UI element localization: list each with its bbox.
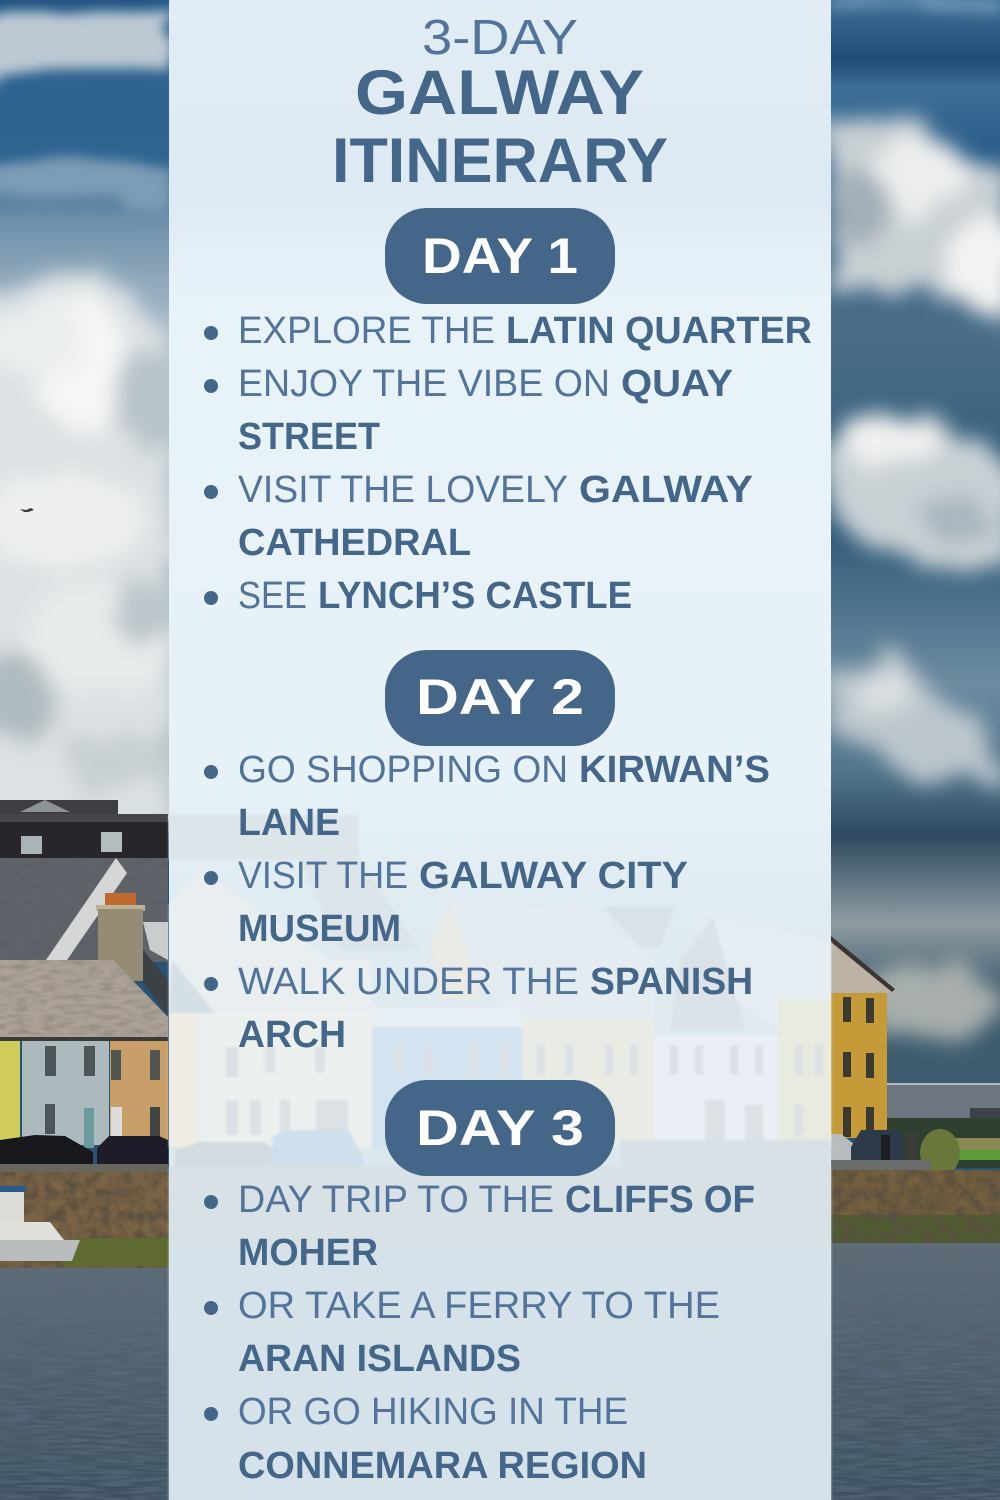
- badge: DAY 1: [385, 208, 615, 304]
- parked cars left: [0, 1135, 168, 1174]
- bird: [20, 508, 34, 512]
- right cumulus clouds: [830, 112, 1000, 1032]
- list: day 1 activities: CATHEDRAL: [238, 522, 471, 564]
- left dark building: [0, 800, 168, 860]
- list: day 1 activities: STREET: [238, 416, 380, 458]
- left slate roof: [0, 858, 168, 962]
- title line: GALWAY: GALWAY: [355, 58, 644, 128]
- stone quay wall: [0, 1170, 1000, 1268]
- list: day 2 activities: KIRWAN’S: [579, 749, 770, 791]
- list: day 3 activities: [204, 1179, 755, 1487]
- list: day 3 activities: CONNEMARA REGION: [238, 1445, 647, 1487]
- coloured houses left: [0, 1037, 168, 1148]
- translucent text panel: [169, 0, 831, 1500]
- list: day 1 activities: ENJOY THE VIBE ON: [238, 363, 610, 405]
- section: day 2: [204, 650, 770, 1056]
- list: day 2 activities: GO SHOPPING ON: [238, 749, 568, 791]
- list: day 1 activities: LYNCH’S CASTLE: [318, 575, 632, 617]
- list: day 2 activities: LANE: [238, 802, 340, 844]
- list: day 2 activities: [204, 749, 770, 1056]
- list: day 1 activities: GALWAY: [579, 469, 753, 511]
- list: day 2 activities: MUSEUM: [238, 908, 401, 950]
- title: [332, 11, 668, 196]
- parked cars and people right: [831, 1130, 931, 1170]
- badge: DAY 1: DAY 1: [422, 228, 578, 284]
- right sky: [830, 0, 1000, 1100]
- title line: ITINERARY: ITINERARY: [332, 126, 668, 196]
- list: day 2 activities: WALK UNDER THE: [238, 961, 579, 1003]
- list: day 2 activities: GALWAY CITY: [419, 855, 688, 897]
- list: day 3 activities: CLIFFS OF: [565, 1179, 755, 1221]
- badge: DAY 2: [385, 650, 615, 746]
- list: day 1 activities: SEE: [238, 575, 307, 617]
- faded terrace seen through panel: [169, 815, 831, 1500]
- industrial building and hedge: [887, 1083, 1000, 1177]
- list: day 3 activities: MOHER: [238, 1232, 378, 1274]
- list: day 2 activities: VISIT THE: [238, 855, 408, 897]
- chimney: [96, 893, 145, 981]
- list: day 1 activities: [204, 310, 812, 617]
- left pale roof and gutter: [143, 950, 168, 1016]
- section: day 3: [204, 1080, 755, 1487]
- list: day 1 activities: EXPLORE THE: [238, 310, 495, 352]
- list: day 2 activities: ARCH: [238, 1014, 346, 1056]
- high streak clouds: [0, 0, 1000, 205]
- list: day 2 activities: SPANISH: [590, 961, 753, 1003]
- moored boat: [0, 1186, 80, 1261]
- badge: DAY 3: DAY 3: [416, 1100, 584, 1156]
- left sky: [0, 0, 170, 820]
- windows row: [226, 1045, 823, 1140]
- section: day 1: [204, 208, 812, 617]
- list: day 3 activities: OR GO HIKING IN THE: [238, 1391, 628, 1433]
- list: day 3 activities: ARAN ISLANDS: [238, 1338, 521, 1380]
- list: day 1 activities: VISIT THE LOVELY: [238, 469, 568, 511]
- list: day 1 activities: QUAY: [621, 363, 733, 405]
- badge: DAY 2: DAY 2: [416, 669, 584, 725]
- list: day 3 activities: OR TAKE A FERRY TO THE: [238, 1285, 720, 1327]
- title line: 3-DAY: 3-DAY: [422, 11, 578, 65]
- list: day 3 activities: DAY TRIP TO THE: [238, 1179, 554, 1221]
- yellow house right: [831, 936, 895, 1138]
- badge: DAY 3: [385, 1080, 615, 1176]
- cars and wall: [175, 1142, 273, 1166]
- water: [0, 1268, 170, 1500]
- list: day 1 activities: LATIN QUARTER: [506, 310, 812, 352]
- left cumulus clouds: [0, 270, 180, 830]
